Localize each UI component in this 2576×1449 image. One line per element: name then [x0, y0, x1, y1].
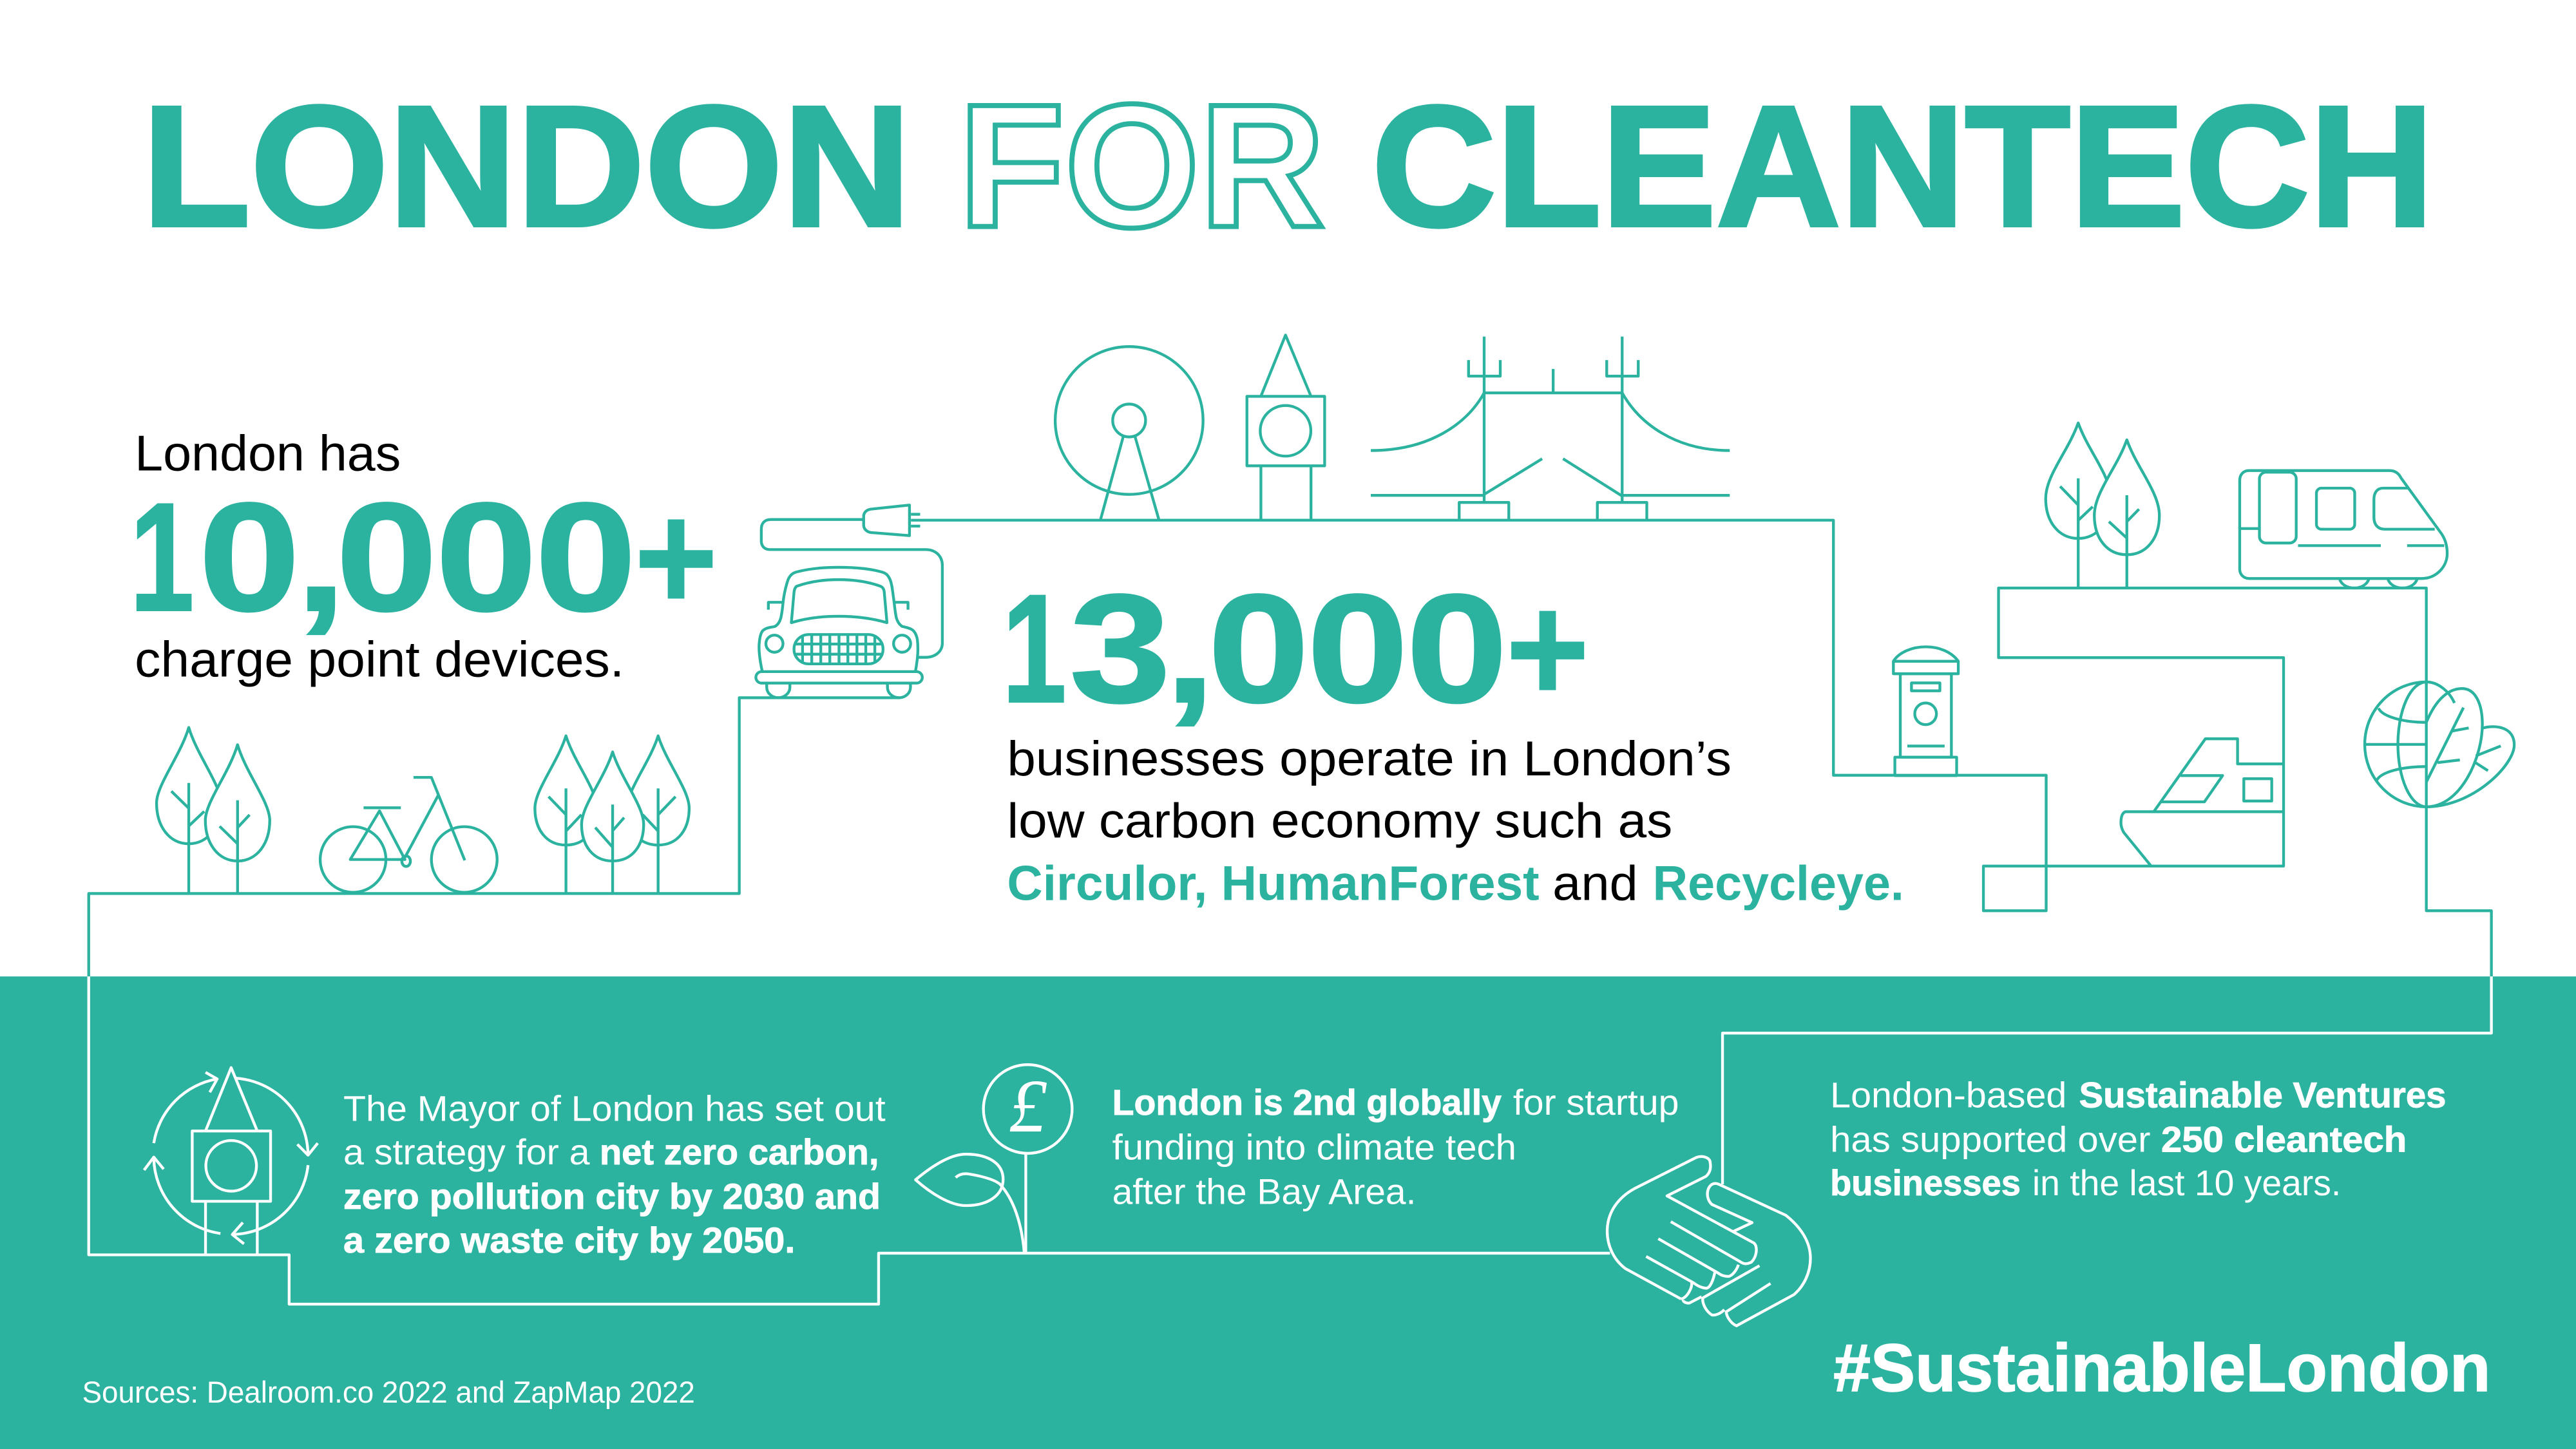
stat: 10,000+ charge points: 0,000	[198, 471, 636, 643]
text: Sustainable Ventures: has supported over	[1830, 1119, 2150, 1159]
icon: globe with leaves	[2365, 682, 2514, 807]
text: Sustainable Ventures: London-based	[1830, 1074, 2066, 1115]
text: Sustainable Ventures: Sustainable Ventures	[2079, 1074, 2447, 1115]
icon: trees upper right	[2046, 423, 2159, 589]
title: LONDON	[142, 71, 911, 262]
icon: handshake	[1607, 1157, 1811, 1326]
title: CLEANTECH	[1372, 71, 2434, 262]
text: Sustainable Ventures: businesses	[1830, 1162, 2021, 1203]
stepped line: right section	[911, 520, 2492, 976]
icon: London Eye	[1055, 346, 1203, 520]
text: Mayor of London strategy: net zero carbon,	[600, 1132, 879, 1172]
text: London 2nd globally: London is 2nd globally	[1112, 1082, 1502, 1122]
text: Mayor of London strategy	[343, 1088, 886, 1260]
stat: 10,000+ charge points: +	[634, 471, 718, 644]
icon: car with charging cable	[756, 505, 942, 697]
icon: Big Ben with recycling arrows	[144, 1068, 318, 1255]
title	[142, 68, 2434, 264]
stat: 13,000+ businesses: businesses operate in London’s	[1007, 732, 1732, 786]
stat: 13,000+ businesses: 3,000	[1069, 562, 1507, 735]
icon: post box	[1893, 647, 1958, 775]
text: Mayor of London strategy: zero pollution city by 2030 and	[343, 1176, 881, 1217]
text: London 2nd globally: after the Bay Area.	[1112, 1171, 1416, 1211]
icon: train	[2240, 471, 2447, 588]
text: Mayor of London strategy: a zero waste city by 2050.	[343, 1220, 795, 1260]
stat: 10,000+ charge points: 1	[129, 471, 194, 643]
stat: 10,000+ charge points	[129, 426, 718, 687]
stat: 10,000+ charge points: London has	[135, 426, 401, 482]
text: London 2nd globally	[1112, 1082, 1679, 1211]
stepped line: white on teal	[89, 976, 2492, 1304]
icon: trees right group	[535, 736, 689, 893]
text: London 2nd globally: for startup	[1513, 1082, 1679, 1122]
text: Mayor of London strategy: The Mayor of London has set out	[343, 1088, 886, 1128]
stat: 13,000+ businesses: Recycleye.	[1653, 857, 1904, 911]
teal lower panel	[0, 976, 2576, 1449]
icon: ship	[2121, 739, 2284, 866]
hashtag: #SustainableLondon	[1833, 1331, 2490, 1406]
stat: 13,000+ businesses: Circulor, HumanForest	[1007, 857, 1540, 911]
icon: bicycle	[320, 777, 497, 893]
icon: Tower Bridge	[1371, 337, 1730, 520]
icon: pound sign plant: £	[1009, 1065, 1047, 1148]
text: London 2nd globally: funding into climate tech	[1112, 1126, 1516, 1167]
stat: 13,000+ businesses	[1002, 562, 1904, 911]
icon: pound sign plant	[915, 1065, 1072, 1253]
icon: Big Ben	[1247, 335, 1324, 520]
icon: trees left pair	[157, 728, 270, 893]
stat: 13,000+ businesses: low carbon economy such as	[1007, 794, 1672, 849]
text: Mayor of London strategy: a strategy for a	[343, 1132, 590, 1172]
stat: 13,000+ businesses: 1	[1002, 562, 1067, 735]
title: FOR	[959, 68, 1325, 264]
stat: 13,000+ businesses: +	[1505, 562, 1590, 735]
text: Sustainable Ventures: 250 cleantech	[2161, 1119, 2407, 1159]
stepped line: left section	[89, 697, 899, 976]
stat: 13,000+ businesses: and	[1552, 857, 1638, 911]
stat: 10,000+ charge points: charge point devices.	[135, 632, 624, 687]
text: Sustainable Ventures: in the last 10 years.	[2032, 1162, 2341, 1203]
sources: Sources: Dealroom.co 2022 and ZapMap 2022	[82, 1375, 695, 1409]
text: Sustainable Ventures	[1830, 1074, 2447, 1203]
